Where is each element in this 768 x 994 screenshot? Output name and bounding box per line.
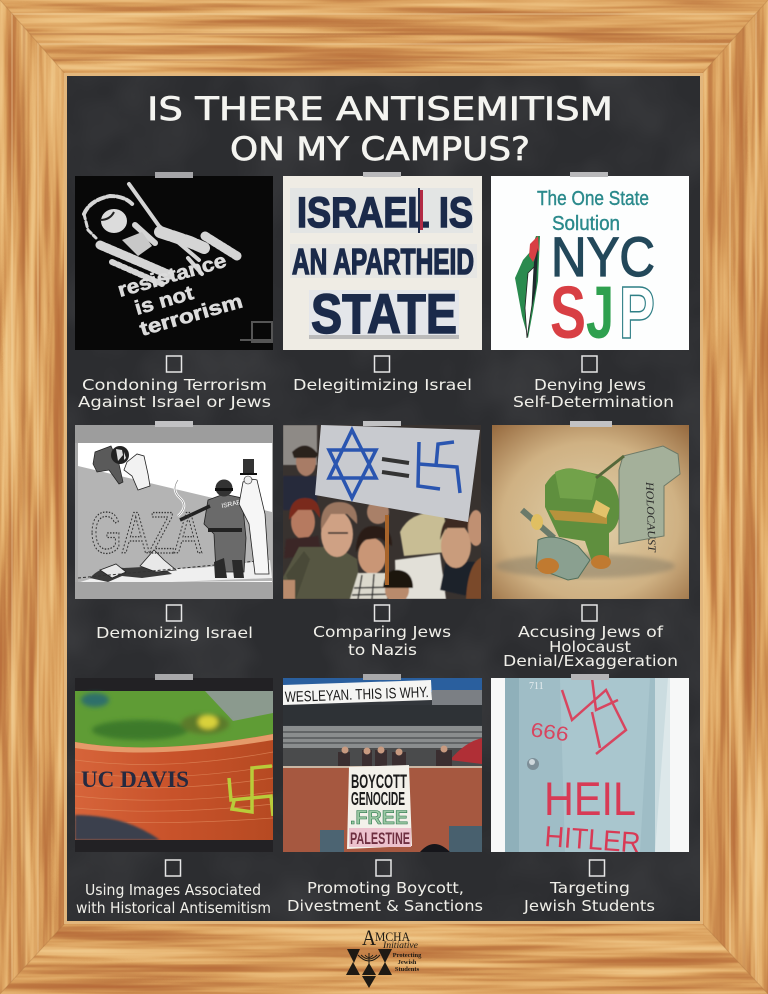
label: Against Israel or Jews xyxy=(78,393,271,411)
chalkboard panel xyxy=(64,73,703,924)
title: IS THERE ANTISEMITISM xyxy=(147,90,613,128)
label: with Historical Antisemitism xyxy=(76,899,271,917)
checkbox xyxy=(376,860,391,876)
checkbox xyxy=(582,356,597,372)
panel: historical antisemitic images xyxy=(75,674,273,917)
logo: AMCHA Initiative: Initiative xyxy=(382,940,418,950)
image: boycott banner at Wesleyan: GENOCIDE xyxy=(351,789,405,809)
label: Holocaust xyxy=(549,638,631,656)
label: Denying Jews xyxy=(534,376,646,394)
label: Jewish Students xyxy=(523,897,655,915)
label: to Nazis xyxy=(348,641,417,659)
tape xyxy=(363,421,401,426)
label: Self-Determination xyxy=(513,393,674,411)
image: graffiti on dorm door: 666 xyxy=(529,719,570,746)
icon: triangle star xyxy=(346,949,392,988)
tape xyxy=(155,421,193,427)
image: resistance is not terrorism shirt: terrorism xyxy=(137,290,245,341)
tape xyxy=(155,674,193,680)
checkbox xyxy=(590,860,604,876)
title: ON MY CAMPUS? xyxy=(230,130,530,168)
label: Delegitimizing Israel xyxy=(293,376,472,394)
label: Targeting xyxy=(549,879,630,897)
title xyxy=(147,90,613,168)
image: one state solution NYC SJP logo: J xyxy=(586,271,614,354)
image: soldier and holocaust stone xyxy=(492,425,689,599)
image: resistance is not terrorism shirt: resistance xyxy=(115,250,229,302)
image: israel is an apartheid state banner: STATE xyxy=(311,282,457,345)
logo: AMCHA Initiative: MCHA xyxy=(375,929,411,944)
panel: delegitimizing israel xyxy=(283,172,482,394)
image: gaza cartoon: ISRAEL xyxy=(221,498,245,510)
image: one state solution NYC SJP logo: NYC xyxy=(551,225,655,288)
tape xyxy=(570,172,608,177)
image: boycott banner at Wesleyan: PALESTINE xyxy=(350,829,410,848)
logo tagline xyxy=(393,952,422,973)
logo: AMCHA Initiative xyxy=(346,925,422,988)
checkbox xyxy=(166,860,180,876)
label xyxy=(513,376,674,411)
logo tagline: Students xyxy=(395,966,420,973)
panel: accusing of holocaust denial xyxy=(492,421,689,670)
tape xyxy=(363,172,401,177)
label xyxy=(78,376,271,411)
image: resistance is not terrorism shirt: is not xyxy=(132,282,196,320)
tape xyxy=(363,674,401,680)
checkbox xyxy=(166,356,182,372)
image: gaza cartoon xyxy=(75,425,273,599)
label xyxy=(503,623,678,670)
tape xyxy=(570,421,612,427)
checkbox xyxy=(374,605,390,621)
label: Divestment & Sanctions xyxy=(287,897,483,915)
image: graffiti on dorm door xyxy=(491,678,689,860)
image: israel is an apartheid state banner: ISRAEL IS xyxy=(297,189,473,237)
image: boycott banner at Wesleyan: WESLEYAN. THIS IS WHY. xyxy=(285,684,429,706)
image: one state solution NYC SJP logo: S xyxy=(550,271,586,354)
checkbox xyxy=(166,605,182,621)
image: graffiti on dorm door: 711 xyxy=(529,681,544,692)
image: graffiti on dorm door: HITLER xyxy=(544,821,642,860)
panel: condoning terrorism xyxy=(75,172,273,411)
image: one state solution NYC SJP logo: Solution xyxy=(552,213,620,235)
image: boycott banner at Wesleyan: .FREE xyxy=(350,808,408,829)
label: Using Images Associated xyxy=(85,881,261,899)
image: resistance is not terrorism shirt xyxy=(75,176,273,350)
panel: comparing jews to nazis xyxy=(283,421,484,659)
label: Promoting Boycott, xyxy=(307,879,464,897)
image: boycott banner at Wesleyan: BOYCOTT xyxy=(351,772,407,793)
image: one state solution NYC SJP logo: P xyxy=(619,271,655,354)
tape xyxy=(155,172,193,178)
panel: targeting jewish students xyxy=(491,674,689,915)
logo wordmark: A xyxy=(362,925,376,950)
image: israel is an apartheid state banner xyxy=(283,176,482,350)
label: Demonizing Israel xyxy=(96,624,253,642)
checkbox xyxy=(374,356,390,372)
image: UC Davis brick wall graffiti xyxy=(75,678,273,852)
panel: demonizing israel xyxy=(75,421,273,642)
label xyxy=(287,879,483,915)
label: Comparing Jews xyxy=(313,623,451,641)
image: soldier and holocaust stone: HOLOCAUST xyxy=(643,481,657,553)
tape xyxy=(571,674,609,680)
image: gaza cartoon: GAZA xyxy=(90,501,202,566)
panel: promoting BDS xyxy=(283,674,483,915)
image: graffiti on dorm door: HEIL xyxy=(544,772,636,825)
label xyxy=(76,881,271,917)
image: UC Davis brick wall graffiti: UC DAVIS xyxy=(81,767,189,792)
panel: denying self-determination xyxy=(491,172,689,411)
label xyxy=(313,623,451,659)
label: Accusing Jews of xyxy=(518,623,664,641)
image: boycott banner at Wesleyan xyxy=(283,678,482,852)
image: one state solution NYC SJP logo: The One State xyxy=(537,188,649,210)
label: Condoning Terrorism xyxy=(82,376,267,394)
label: Denial/Exaggeration xyxy=(503,652,678,670)
image: one state solution NYC SJP logo xyxy=(491,176,689,354)
logo tagline: Protecting xyxy=(393,952,422,959)
image: crowd holding sign xyxy=(283,425,484,603)
label xyxy=(523,879,655,915)
checkbox xyxy=(582,605,597,621)
image: israel is an apartheid state banner: AN APARTHEID xyxy=(292,241,474,282)
logo tagline: Jewish xyxy=(398,959,417,966)
